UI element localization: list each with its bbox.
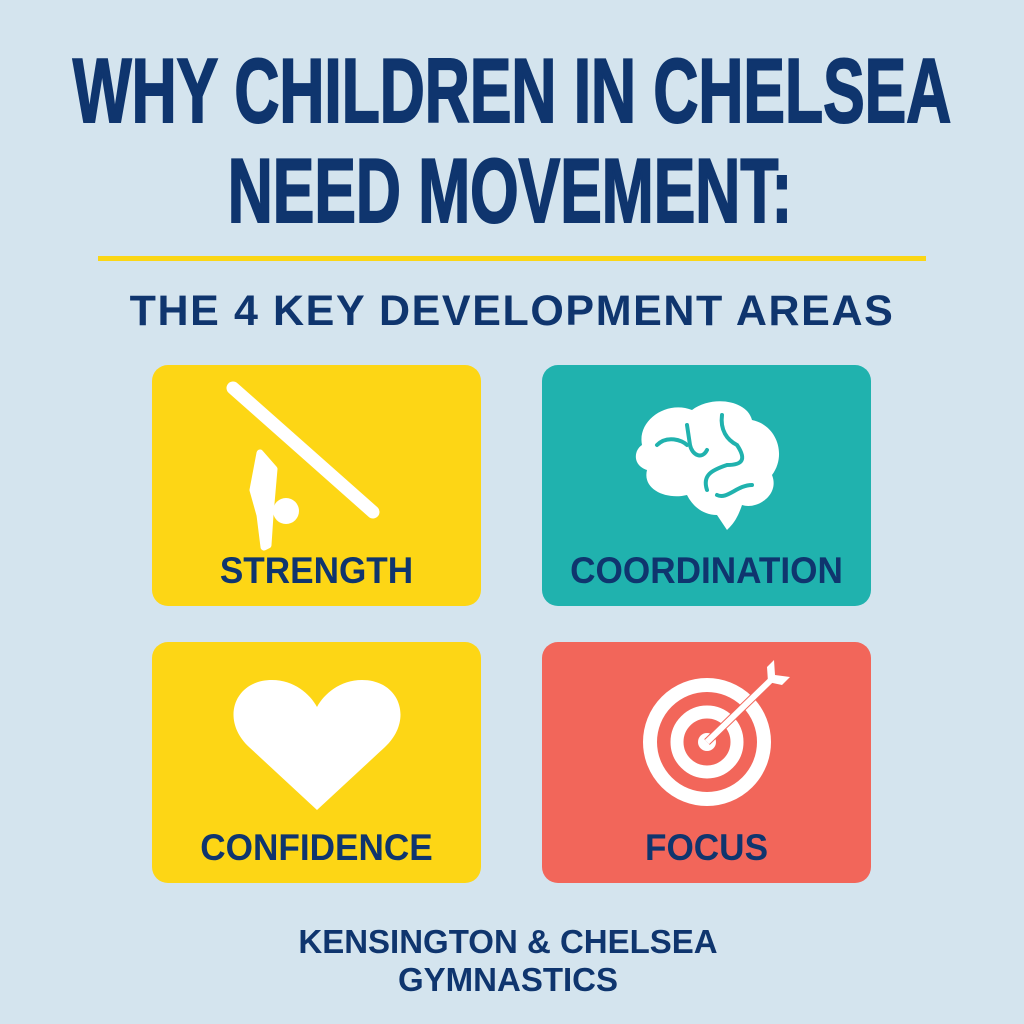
footer — [298, 923, 718, 998]
footer: KENSINGTON & CHELSEA — [298, 923, 718, 960]
subtitle: THE 4 KEY DEVELOPMENT AREAS — [130, 287, 894, 335]
panel: focus — [542, 642, 871, 883]
icon: target — [643, 660, 790, 806]
title: NEED MOVEMENT: — [228, 141, 792, 240]
panel: confidence — [152, 642, 481, 883]
panel: confidence: CONFIDENCE — [200, 827, 433, 868]
panel: focus: FOCUS — [645, 827, 768, 868]
title: WHY CHILDREN IN CHELSEA — [73, 41, 951, 142]
title — [72, 41, 951, 240]
panel: coordination: COORDINATION — [570, 550, 843, 591]
panel: coordination — [542, 365, 871, 606]
panel: strength — [152, 365, 481, 606]
panel: strength: STRENGTH — [220, 550, 413, 591]
icon: gymnast — [226, 382, 380, 550]
footer: GYMNASTICS — [398, 961, 618, 998]
yellow rule — [98, 256, 926, 261]
icon: heart — [234, 680, 400, 810]
icon: brain — [636, 401, 780, 530]
